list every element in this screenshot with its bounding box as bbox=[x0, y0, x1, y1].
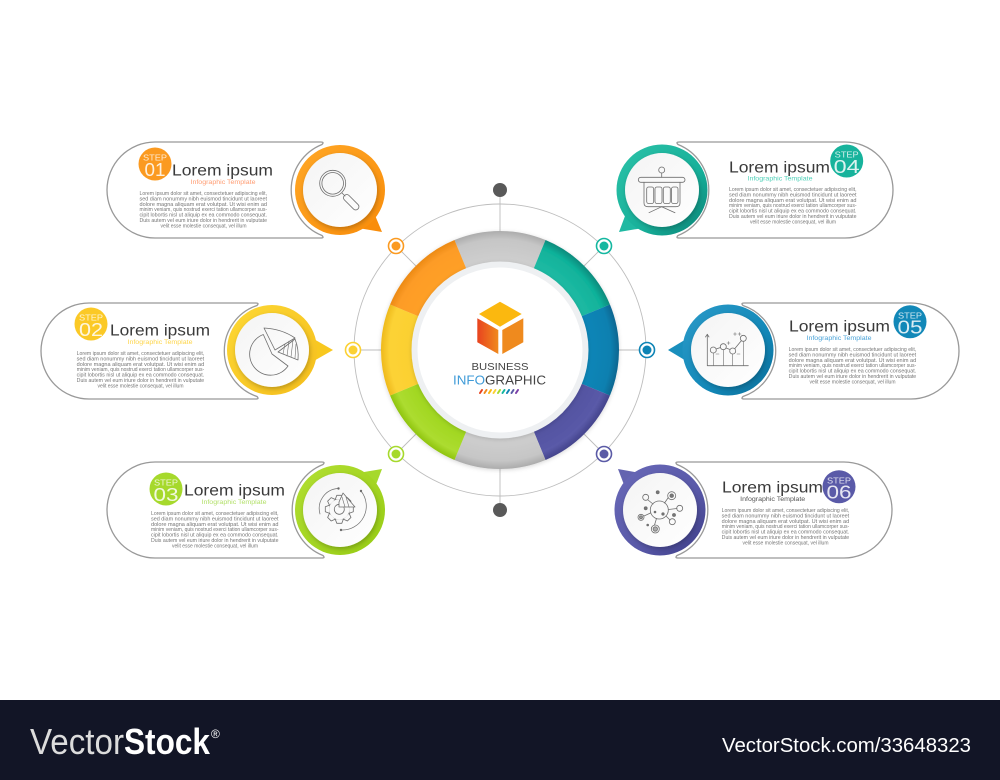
node: purple bbox=[596, 446, 612, 462]
heading: Lorem ipsum bbox=[172, 163, 273, 180]
icon: molecule network bbox=[638, 491, 683, 533]
step badge: STEP bbox=[835, 150, 859, 160]
speech bubble bbox=[668, 304, 774, 396]
body text: minim veniam, quis nostrud exerci tation ullamcorper sus- bbox=[77, 367, 205, 373]
panel: step 03 bbox=[107, 462, 385, 558]
footer bar bbox=[0, 700, 1000, 780]
footer logo: ® bbox=[211, 727, 220, 741]
segmented colour ring bbox=[381, 231, 619, 469]
step badge: 03 bbox=[154, 485, 178, 505]
body text bbox=[77, 351, 205, 389]
orbit ring and connector lines bbox=[353, 190, 647, 510]
body text: minim veniam, quis nostrud exerci tation ullamcorper sus- bbox=[729, 203, 857, 209]
subtitle: Infographic Template bbox=[740, 496, 806, 503]
speech bubble bbox=[227, 305, 333, 395]
body text: Lorem ipsum dolor sit amet, consectetuer adipiscing elit, bbox=[77, 351, 204, 357]
node: yellow bbox=[346, 342, 360, 358]
speech bubble bbox=[295, 145, 385, 235]
body text: Duis autem vel eum iriure dolor in hendrerit in vulputate bbox=[722, 535, 849, 541]
body text: dolore magna aliquam erat volutpat. Ut wisi enim ad bbox=[789, 358, 916, 364]
body text: Duis autem vel eum iriure dolor in hendrerit in vulputate bbox=[77, 378, 204, 384]
step badge: STEP bbox=[143, 153, 167, 163]
panel: step 02 bbox=[41, 303, 333, 399]
step badge bbox=[822, 470, 856, 503]
rainbow dashes bbox=[480, 390, 518, 393]
footer logo bbox=[30, 721, 220, 762]
body text: minim veniam, quis nostrud exerci tation ullamcorper sus- bbox=[151, 527, 279, 533]
panel outline bbox=[107, 462, 324, 558]
speech bubble bbox=[295, 465, 385, 555]
step badge: STEP bbox=[154, 478, 178, 488]
step badge: 05 bbox=[898, 318, 922, 338]
body text: cipit lobortis nisl ut aliquip ex ea commodo consequat. bbox=[789, 369, 916, 375]
central diagram bbox=[353, 183, 647, 517]
body text: Lorem ipsum dolor sit amet, consectetuer adipiscing elit, bbox=[722, 508, 849, 514]
body text: dolore magna aliquam erat volutpat. Ut wisi enim ad bbox=[151, 522, 279, 528]
panel outline bbox=[41, 303, 258, 399]
body text: sed diam nonummy nibh euismod tincidunt ut laoreet bbox=[789, 352, 917, 358]
icon: magnifier bbox=[320, 170, 360, 211]
body text: minim veniam, quis nostrud exerci tation ullamcorper sus- bbox=[789, 363, 917, 369]
body text bbox=[722, 508, 850, 546]
step badge: STEP bbox=[827, 475, 851, 485]
body text bbox=[140, 191, 268, 229]
node: orange bbox=[388, 238, 404, 254]
panel: step 06 bbox=[614, 462, 892, 558]
panel outline bbox=[676, 462, 892, 558]
step badge: STEP bbox=[898, 310, 922, 320]
step badge bbox=[894, 305, 926, 338]
body text: cipit lobortis nisl ut aliquip ex ea commodo consequat. bbox=[140, 213, 267, 219]
body text: cipit lobortis nisl ut aliquip ex ea commodo consequat. bbox=[77, 373, 204, 379]
step badge: 04 bbox=[834, 157, 860, 177]
step badge bbox=[138, 148, 172, 180]
subtitle: Infographic Template bbox=[806, 335, 872, 342]
body text: cipit lobortis nisl ut aliquip ex ea commodo consequat. bbox=[729, 209, 856, 215]
body text: velit esse molestie consequat, vel illum bbox=[172, 543, 258, 549]
body text: dolore magna aliquam erat volutpat. Ut wisi enim ad bbox=[722, 519, 849, 525]
node: blue bbox=[640, 342, 654, 358]
body text bbox=[729, 187, 857, 225]
step badge: STEP bbox=[79, 313, 103, 323]
body text: Duis autem vel eum iriure dolor in hendrerit in vulputate bbox=[789, 374, 916, 380]
heading: Lorem ipsum bbox=[789, 319, 890, 336]
panel outline bbox=[107, 142, 323, 238]
heading: Lorem ipsum bbox=[729, 159, 830, 176]
step badge: 02 bbox=[79, 320, 103, 340]
panel outline bbox=[742, 303, 959, 399]
panel outline bbox=[677, 142, 893, 238]
body text: sed diam nonummy nibh euismod tincidunt ut laoreet bbox=[729, 192, 857, 198]
footer url: VectorStock.com/33648323 bbox=[722, 735, 971, 757]
node: green bbox=[388, 446, 404, 462]
icon: line chart bbox=[706, 332, 748, 366]
step badge bbox=[830, 144, 863, 178]
body text: cipit lobortis nisl ut aliquip ex ea commodo consequat. bbox=[151, 533, 278, 539]
node: teal bbox=[596, 238, 612, 254]
step badge bbox=[150, 472, 182, 506]
speech bubble bbox=[616, 144, 708, 236]
top grey dot bbox=[493, 183, 507, 197]
body text bbox=[151, 511, 279, 549]
subtitle: Infographic Template bbox=[748, 176, 813, 182]
icon: cube logo bbox=[477, 302, 523, 354]
body text: Lorem ipsum dolor sit amet, consectetuer adipiscing elit, bbox=[789, 347, 916, 353]
footer logo: Stock bbox=[124, 721, 211, 762]
body text: minim veniam, quis nostrud exerci tation ullamcorper sus- bbox=[140, 207, 267, 213]
body text: Duis autem vel eum iriure dolor in hendrerit in vulputate bbox=[140, 218, 267, 224]
subtitle: Infographic Template bbox=[190, 179, 256, 186]
hub title: infographic: INFOGRAPHIC bbox=[453, 372, 546, 388]
step badge bbox=[74, 308, 108, 340]
body text: sed diam nonummy nibh euismod tincidunt ut laoreet bbox=[151, 516, 279, 522]
body text: cipit lobortis nisl ut aliquip ex ea commodo consequat. bbox=[722, 530, 849, 536]
body text bbox=[789, 347, 917, 385]
bottom grey dot bbox=[493, 503, 507, 517]
body text: Lorem ipsum dolor sit amet, consectetuer adipiscing elit, bbox=[729, 187, 856, 193]
body text: sed diam nonummy nibh euismod tincidunt ut laoreet bbox=[140, 196, 268, 202]
panel: step 01 bbox=[107, 142, 385, 238]
body text: dolore magna aliquam erat volutpat. Ut wisi enim ad bbox=[729, 198, 857, 204]
heading: Lorem ipsum bbox=[184, 482, 285, 500]
speech bubble bbox=[614, 464, 706, 556]
body text: velit esse molestie consequat, vel illum bbox=[810, 379, 896, 385]
body text: Duis autem vel eum iriure dolor in hendrerit in vulputate bbox=[729, 214, 857, 220]
panel: step 05 bbox=[668, 303, 959, 399]
hub title: business: BUSINESS bbox=[472, 361, 528, 373]
body text: sed diam nonummy nibh euismod tincidunt ut laoreet bbox=[722, 513, 850, 519]
step badge: 01 bbox=[144, 160, 166, 180]
body text: minim veniam, quis nostrud exerci tation ullamcorper sus- bbox=[722, 524, 850, 530]
heading: Lorem ipsum bbox=[722, 479, 823, 496]
body text: velit esse molestie consequat, vel illum bbox=[98, 383, 184, 389]
icon: pie chart bbox=[250, 328, 298, 375]
subtitle: Infographic Template bbox=[128, 339, 193, 346]
panel: step 04 bbox=[616, 142, 893, 238]
body text: velit esse molestie consequat, vel illum bbox=[742, 540, 828, 546]
body text: velit esse molestie consequat, vel illum bbox=[750, 219, 836, 225]
body text: velit esse molestie consequat, vel illum bbox=[160, 223, 246, 229]
body text: dolore magna aliquam erat volutpat. Ut wisi enim ad bbox=[77, 362, 204, 368]
subtitle: Infographic Template bbox=[202, 499, 267, 506]
body text: sed diam nonummy nibh euismod tincidunt ut laoreet bbox=[77, 356, 205, 362]
body text: dolore magna aliquam erat volutpat. Ut wisi enim ad bbox=[140, 202, 267, 208]
body text: Lorem ipsum dolor sit amet, consectetuer adipiscing elit, bbox=[151, 511, 278, 517]
step badge: 06 bbox=[826, 483, 852, 503]
body text: Lorem ipsum dolor sit amet, consectetuer adipiscing elit, bbox=[140, 191, 267, 197]
heading: Lorem ipsum bbox=[110, 323, 210, 340]
body text: Duis autem vel eum iriure dolor in hendrerit in vulputate bbox=[151, 538, 279, 544]
icon: gear with arrows bbox=[319, 488, 366, 531]
inner hub circle bbox=[412, 262, 588, 438]
footer logo: Vector bbox=[30, 721, 124, 762]
icon: presentation board bbox=[638, 167, 685, 213]
